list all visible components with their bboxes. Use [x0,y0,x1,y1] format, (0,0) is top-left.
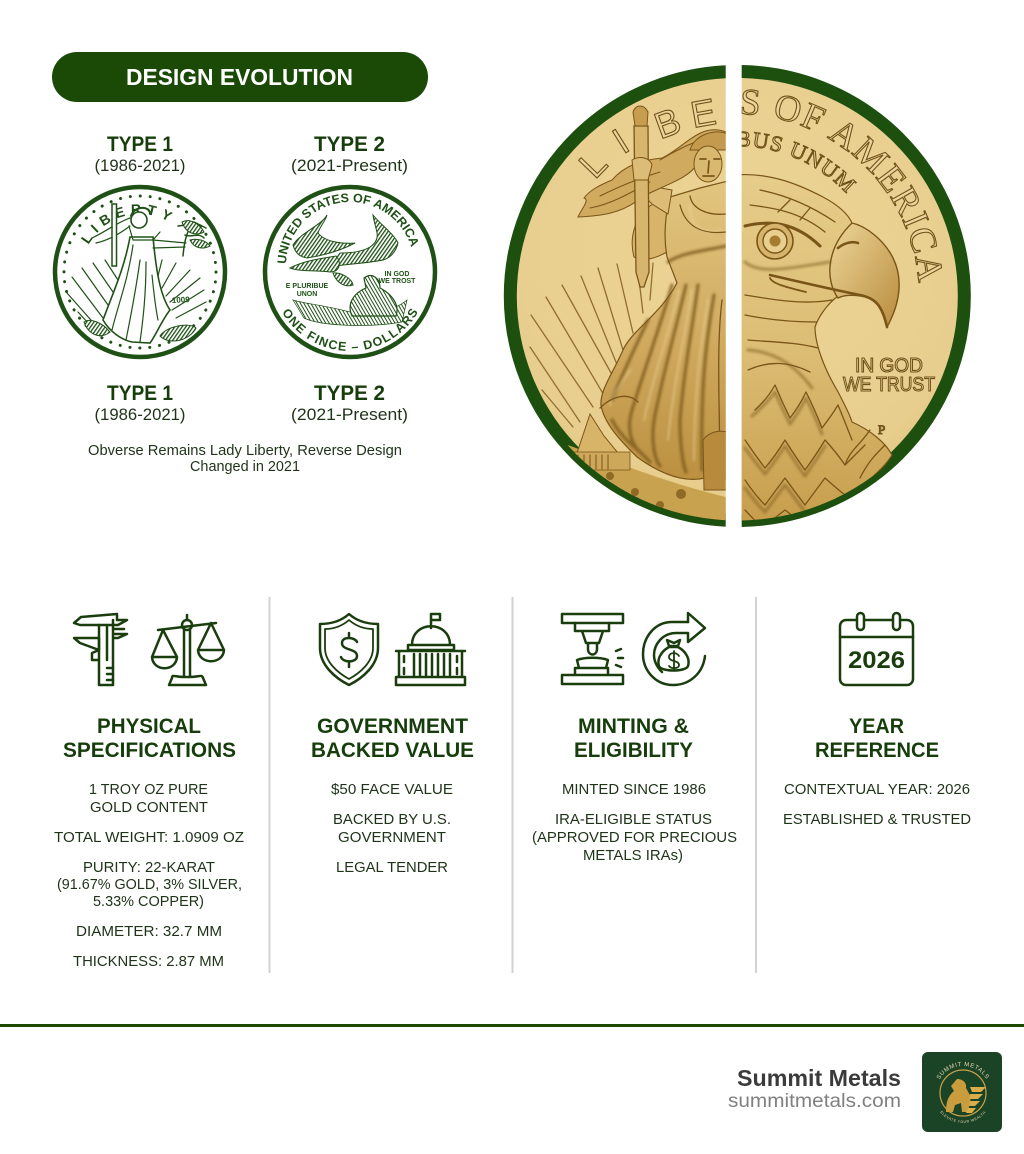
brand name and url: Summit Metals [737,1065,901,1091]
coin right half: eagle: P [878,422,885,437]
text: specification list: THICKNESS: 2.87 MM [73,954,224,970]
panel: government backed value [311,614,474,876]
coin right half: eagle [742,65,971,527]
label: type 2 top: TYPE 2 [314,133,385,156]
label: type 2 bottom: (2021-Present) [291,405,408,424]
text: specification list: (91.67% GOLD, 3% SILVER, [57,877,242,893]
lettering left: B [649,100,686,147]
coin left half: Lady Liberty [504,65,726,527]
label: type 2 bottom: TYPE 2 [314,382,385,405]
coin: type 1 Lady Liberty line art: LIBERTY [80,204,173,244]
icon: coin press [562,614,623,684]
caption: design note: Obverse Remains Lady Liberty, Reverse Design [88,443,402,459]
text: specification list: TOTAL WEIGHT: 1.0909 OZ [54,830,244,846]
icon: caliper [74,614,127,685]
heading: physical specifications [63,715,236,762]
sun rays [530,263,653,427]
text: value list: BACKED BY U.S. [333,812,451,828]
label: type 1 bottom: (1986-2021) [94,405,186,424]
coin: type 2 eagle line art: E PLURIBUE [286,283,329,290]
text: minting list: (APPROVED FOR PRECIOUS [532,830,737,846]
icon: money bag return arrow [643,613,705,685]
label: type 2 top [291,133,408,175]
text: specification list [54,782,244,970]
heading: government backed value: BACKED VALUE [311,739,474,762]
label: type 2 bottom [291,382,408,424]
icon: calendar 2026: 2026 [848,647,905,674]
coin right half: eagle: BUS UNUM [742,131,857,194]
heading: government backed value: GOVERNMENT [317,715,468,738]
text: specification list: 1 TROY OZ PURE [89,782,208,798]
caption: design note: Changed in 2021 [190,459,300,475]
coin: type 2 eagle line art: UNON [297,291,317,298]
text: specification list: 5.33% COPPER) [93,894,204,910]
heading: year reference: YEAR [849,715,904,738]
heading pill: design evolution: DESIGN EVOLUTION [126,64,353,90]
brand name and url: summitmetals.com [728,1091,901,1112]
panel: year reference [783,613,971,828]
label: type 2 top: (2021-Present) [291,156,408,175]
heading: year reference: REFERENCE [815,739,939,762]
icon: capitol building [396,614,465,685]
footer [0,1024,1024,1132]
heading: minting and eligibility [574,715,693,762]
label: type 1 top [94,133,186,175]
coin: type 2 eagle line art: IN GOD [385,271,409,278]
lettering left: E [688,91,719,136]
heading: year reference [815,715,939,762]
coin: type 2 eagle line art: WE TROST [379,278,416,285]
coin: type 2 eagle line art: ONE FINCE – DOLLARS [284,308,417,351]
text: specification list: PURITY: 22-KARAT [83,860,215,876]
heading: government backed value [311,715,474,762]
large split coin [504,65,971,527]
text: year list [783,782,971,828]
lettering left: L [571,142,615,186]
icon: calendar 2026 [840,613,913,685]
logo: summit metals seal [922,1052,1002,1132]
text: value list [331,782,453,876]
text: value list: $50 FACE VALUE [331,782,453,798]
text: value list: LEGAL TENDER [336,860,448,876]
coin right half: eagle: WE TRUST [843,374,935,396]
coin right half: eagle: IN GOD [855,355,923,377]
panel: design evolution [52,52,438,475]
icon: balance scale [152,615,224,685]
label: type 1 top: (1986-2021) [94,156,186,175]
heading pill: design evolution [52,52,428,102]
panel: minting and eligibility [532,613,737,864]
panel: physical specifications [54,614,244,970]
icon: dollar shield [320,614,378,685]
label: type 1 top: TYPE 1 [107,133,173,156]
coin: type 1 Lady Liberty line art: 1009 [172,295,190,305]
text: value list: GOVERNMENT [338,830,446,846]
label: type 1 bottom: TYPE 1 [107,382,173,405]
text: minting list: MINTED SINCE 1986 [562,782,706,798]
lettering right: S OF AMERICA [742,89,942,284]
text: specification list: DIAMETER: 32.7 MM [76,924,222,940]
figure [632,204,666,260]
text: minting list: IRA-ELIGIBLE STATUS [555,812,712,828]
coin: type 2 eagle line art [262,184,438,360]
heading: minting and eligibility: MINTING & [578,715,689,738]
text: year list: ESTABLISHED & TRUSTED [783,812,971,828]
heading: minting and eligibility: ELIGIBILITY [574,739,693,762]
label: type 1 bottom [94,382,186,424]
text: year list: CONTEXTUAL YEAR: 2026 [784,782,970,798]
text: specification list: GOLD CONTENT [90,800,208,816]
lettering left [578,98,717,179]
dress shading [612,246,726,472]
caption: design note [88,443,402,475]
brand name and url [728,1065,901,1112]
heading: physical specifications: PHYSICAL [97,715,201,738]
coin: type 2 eagle line art: UNITED STATES OF AMERICA [277,194,418,264]
text: minting list: METALS IRAs) [583,848,683,864]
logo: summit metals seal: SUMMIT METALS [936,1062,989,1079]
logo: summit metals seal: ELEVATE YOUR WEALTH [940,1110,986,1123]
coin: type 1 Lady Liberty line art [52,184,228,360]
text: minting list [532,782,737,864]
lettering left: I [606,121,636,161]
heading: physical specifications: SPECIFICATIONS [63,739,236,762]
